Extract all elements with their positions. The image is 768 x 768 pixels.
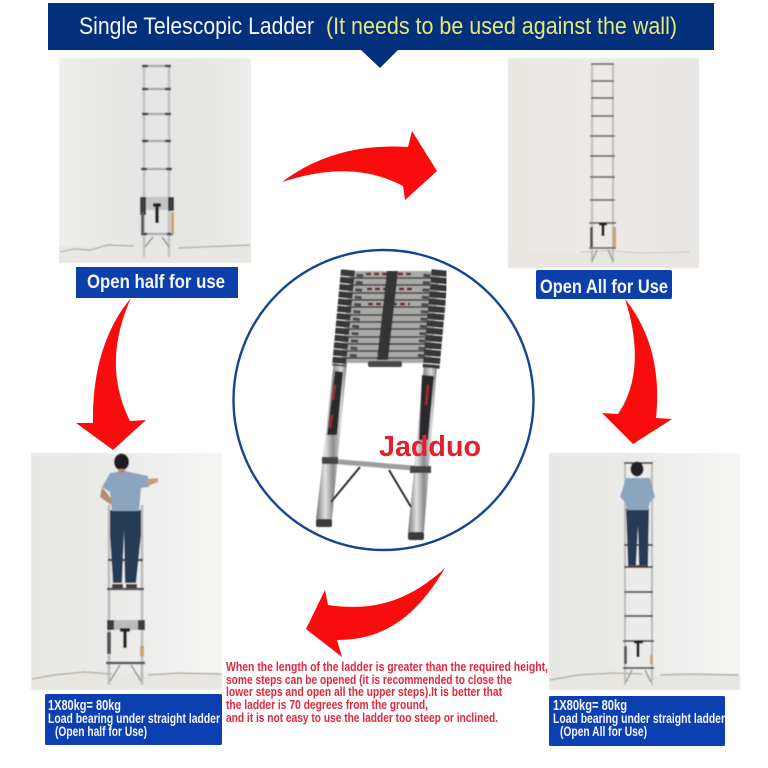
header banner xyxy=(48,3,714,68)
info box: open all: (Open All for Use) xyxy=(560,724,647,739)
brand name: Jadduo xyxy=(379,431,481,463)
rail stickers xyxy=(327,371,343,435)
label: open all: Open All for Use xyxy=(540,276,668,298)
braces xyxy=(331,467,411,507)
label: open half: Open half for use xyxy=(87,271,225,293)
photo: ladder open all xyxy=(508,58,699,268)
info box: open all xyxy=(549,696,726,746)
arrow: right curved down xyxy=(602,299,672,444)
info box: open half xyxy=(45,694,222,745)
feet xyxy=(316,519,332,527)
info box: open half: 1X80kg= 80kg xyxy=(48,697,121,714)
photo: person on half-open ladder xyxy=(31,453,222,690)
header title white: Single Telescopic Ladder xyxy=(79,13,314,40)
lower rails xyxy=(316,360,347,519)
label: open half xyxy=(76,267,238,298)
arrow: left curved down xyxy=(76,298,146,450)
folded rungs xyxy=(341,271,440,363)
red usage note: the ladder is 70 degrees from the ground, xyxy=(226,697,428,712)
center circle with ladder xyxy=(234,250,534,550)
strap and handle xyxy=(377,271,398,360)
arrow: top curved right xyxy=(282,131,437,200)
photo: person on fully open ladder xyxy=(549,453,740,690)
info box: open all: 1X80kg= 80kg xyxy=(553,697,627,714)
red usage note: and it is not easy to use the ladder too steep or inclined. xyxy=(226,710,498,725)
person xyxy=(626,508,649,565)
crossbar xyxy=(323,458,431,472)
red usage note: some steps can be opened (it is recommended to close the xyxy=(226,672,512,687)
red usage note xyxy=(226,659,548,725)
person xyxy=(110,510,141,583)
red usage note: When the length of the ladder is greater than the required height, xyxy=(226,659,548,674)
arrow: bottom curved left xyxy=(306,568,445,657)
product ladder xyxy=(316,270,440,540)
red usage note: lower steps and open all the upper steps).It is better that xyxy=(226,684,503,699)
info box: open half: Load bearing under straight ladder xyxy=(48,711,221,726)
photo: ladder open half xyxy=(59,58,251,263)
label: open all xyxy=(536,270,672,299)
header note yellow: (It needs to be used against the wall) xyxy=(326,13,677,40)
info box: open half: (Open half for Use) xyxy=(55,724,147,739)
